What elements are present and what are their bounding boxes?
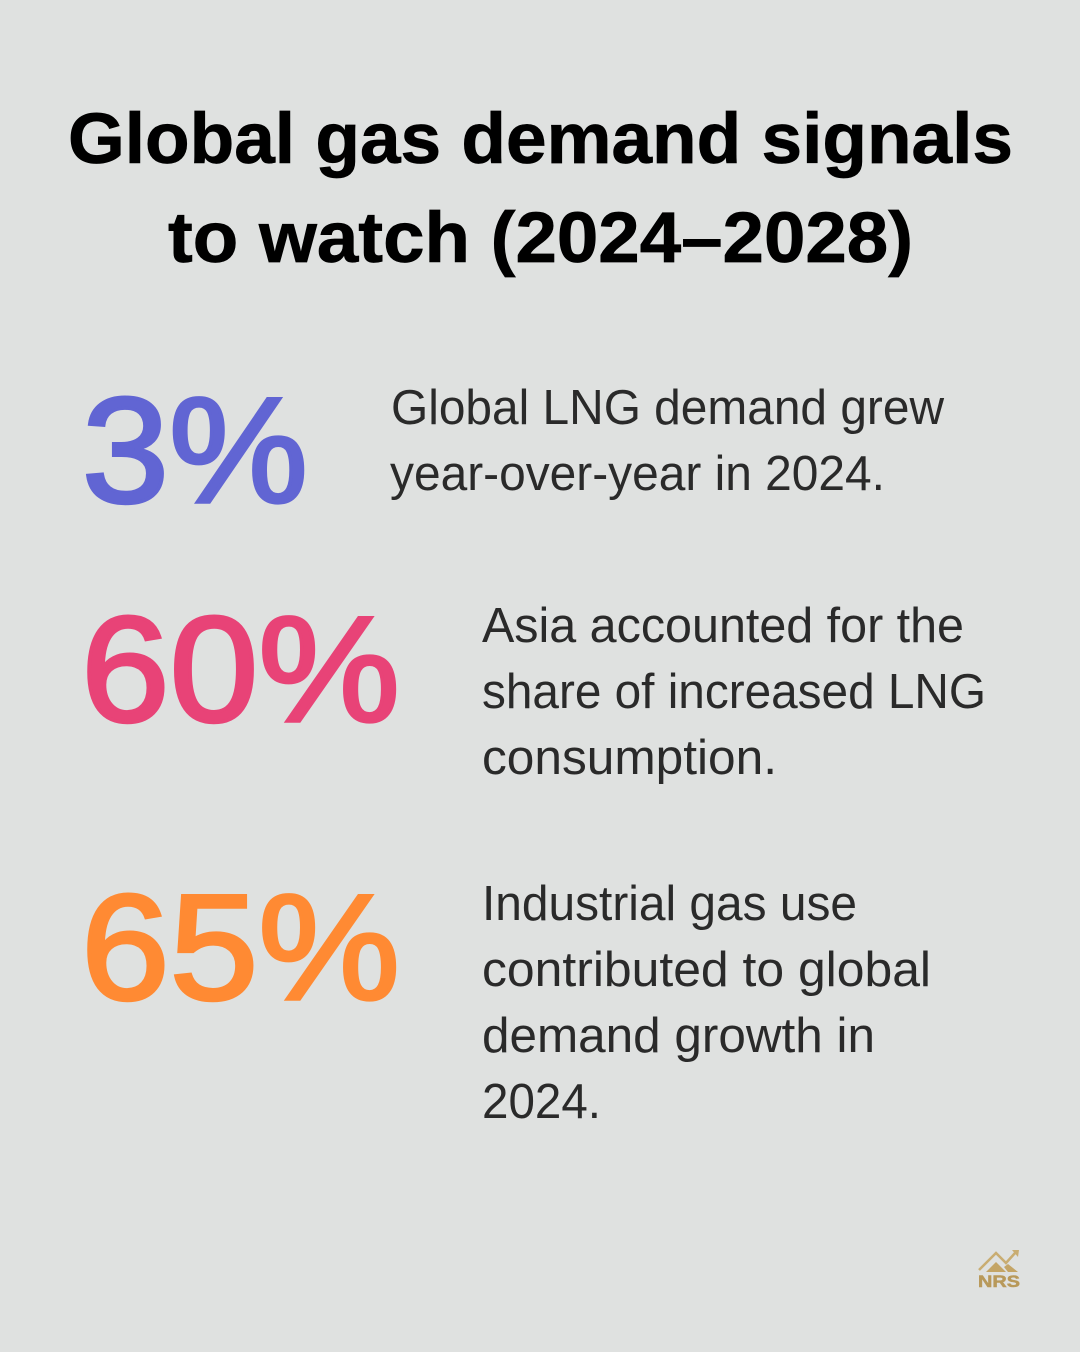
description: Asia share: share of increased LNG (482, 665, 986, 719)
title: Global gas demand signals (68, 100, 1013, 179)
stat: 60% Asia share (81, 585, 986, 785)
description: industrial use (482, 877, 931, 1129)
number: 60%: 60% (81, 585, 400, 753)
number: 3%: 3% (82, 366, 308, 534)
description: industrial use: 2024. (482, 1075, 601, 1129)
stat: 65% industrial use (81, 863, 931, 1129)
description: Asia share: Asia accounted for the (482, 599, 964, 653)
stat: 3% LNG demand growth (82, 366, 945, 534)
description: industrial use: Industrial gas use (482, 877, 857, 931)
logo: NRS (978, 1250, 1020, 1291)
description: industrial use: demand growth in (482, 1009, 875, 1063)
number: 65%: 65% (81, 863, 400, 1031)
description: LNG demand growth: Global LNG demand grew (391, 381, 945, 435)
description: LNG demand growth (390, 381, 945, 501)
description: industrial use: contributed to global (482, 943, 931, 997)
logo: NRS: NRS (978, 1272, 1020, 1291)
title: to watch (2024–2028) (168, 199, 913, 278)
title (68, 100, 1013, 278)
description: LNG demand growth: year-over-year in 2024. (390, 447, 885, 501)
description: Asia share (482, 599, 986, 785)
description: Asia share: consumption. (482, 731, 777, 785)
